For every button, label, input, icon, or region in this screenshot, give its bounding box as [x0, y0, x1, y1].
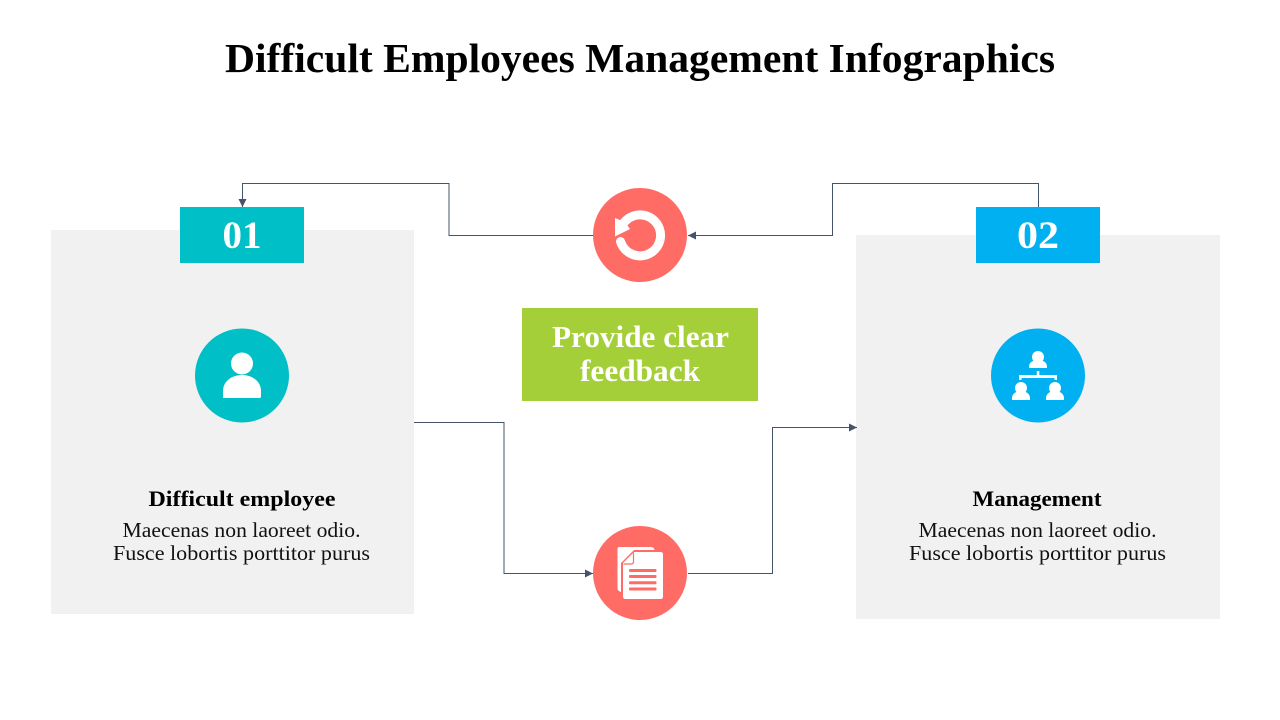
arrow: management badge to feedback	[688, 184, 1038, 236]
icon: organisation chart	[991, 328, 1085, 422]
icon: person	[195, 328, 289, 422]
callout: provide clear feedback: Provide clear	[552, 319, 729, 354]
panel: management	[856, 207, 1220, 619]
badge: 01	[180, 207, 304, 263]
arrow: employee panel to document	[414, 422, 593, 574]
text block: management: Fusce lobortis porttitor purus	[909, 541, 1166, 565]
text block: management: Maecenas non laoreet odio.	[918, 518, 1156, 542]
icon: refresh	[593, 188, 687, 282]
panel: difficult employee	[51, 207, 414, 614]
badge: 02	[976, 207, 1100, 263]
callout: provide clear feedback: feedback	[580, 353, 701, 388]
text block: management	[909, 518, 1166, 565]
text block: difficult employee	[113, 518, 370, 565]
text block: difficult employee: Maecenas non laoreet odio.	[122, 518, 360, 542]
icon: document	[593, 526, 687, 620]
text block: difficult employee: Fusce lobortis porttitor purus	[113, 541, 370, 565]
heading: difficult employee: Difficult employee	[148, 486, 336, 511]
heading: management: Management	[972, 486, 1102, 511]
title: Difficult Employees Management Infographics	[225, 35, 1055, 81]
arrow: feedback to employee badge	[242, 184, 593, 236]
arrow: document to management panel	[688, 428, 857, 574]
callout: provide clear feedback	[522, 308, 758, 401]
badge: 02: 02	[1017, 214, 1059, 257]
badge: 01: 01	[222, 214, 262, 257]
